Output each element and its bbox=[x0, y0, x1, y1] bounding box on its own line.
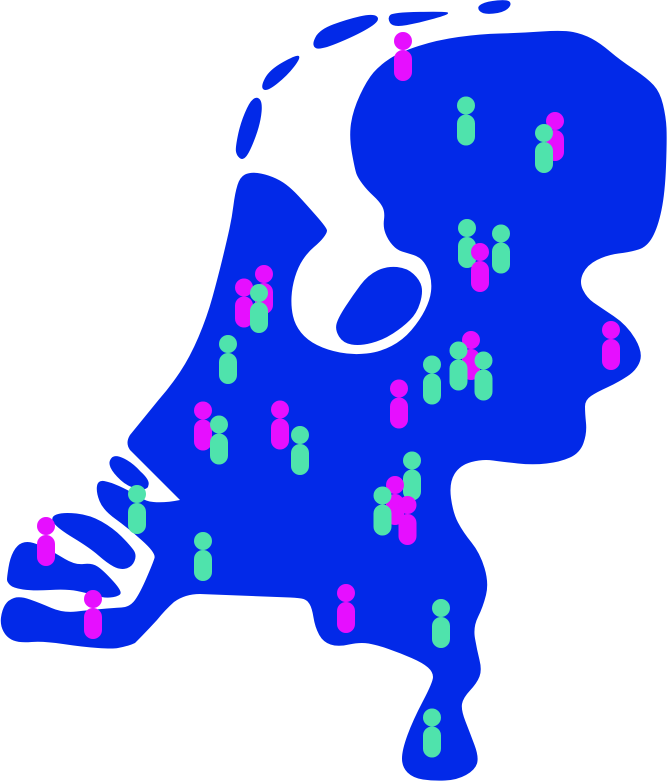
marker: magenta person, south-west island bbox=[37, 517, 55, 566]
marker: green person, west-centre bbox=[210, 416, 228, 464]
marker: green person, centre-north right bbox=[492, 224, 510, 274]
marker: green person, south-west peninsula bbox=[128, 485, 146, 534]
map: inner lake polder island bbox=[336, 267, 422, 345]
marker: magenta person, river area bbox=[386, 476, 404, 525]
marker: magenta person, centre bbox=[390, 380, 408, 428]
marker: magenta person, east edge bbox=[602, 321, 620, 370]
marker: green person, mid-west bbox=[291, 426, 309, 475]
marker: magenta person, far south-west bbox=[84, 590, 102, 639]
marker: green person, south-east bbox=[432, 599, 450, 648]
map: northern island 1 bbox=[236, 98, 261, 158]
marker: magenta person, centre-east bbox=[462, 331, 480, 380]
map: south-west island, large bbox=[7, 542, 121, 598]
marker: magenta person, north coast bbox=[394, 32, 412, 81]
marker: magenta person, north-east bbox=[546, 112, 564, 161]
marker: green person, river area top bbox=[403, 452, 421, 500]
marker: green person, centre-north left bbox=[458, 219, 476, 268]
marker: green person, north-east bbox=[535, 124, 553, 173]
map: northern island 5 bbox=[479, 1, 510, 13]
marker: green person, Holland upper bbox=[250, 284, 268, 333]
marker: green person, west bbox=[219, 335, 237, 384]
marker: magenta person, south bbox=[337, 584, 355, 633]
map: northern island 4 bbox=[389, 12, 448, 25]
marker: green person, river area left bbox=[374, 486, 392, 536]
marker: green person, centre-east right bbox=[474, 352, 492, 400]
marker: magenta person, centre-north bbox=[471, 243, 489, 292]
marker: magenta person, Holland upper left bbox=[235, 278, 253, 328]
map: northern island 3 bbox=[314, 16, 377, 48]
marker: magenta person, mid-west bbox=[271, 400, 289, 450]
marker: green person, centre-east middle bbox=[450, 342, 468, 390]
marker: green person, centre-east left bbox=[423, 356, 441, 404]
marker: magenta person, river area right bbox=[398, 496, 416, 545]
map: northern island 2 bbox=[263, 56, 299, 89]
marker: green person, south-west bbox=[194, 532, 212, 581]
map: south-west island, middle bbox=[52, 513, 136, 569]
marker: magenta person, Holland upper right bbox=[255, 265, 273, 314]
marker: magenta person, west-centre bbox=[194, 402, 212, 450]
marker: green person, far south bbox=[423, 708, 441, 758]
map: south-west island, narrow bbox=[109, 456, 149, 489]
marker: green person, north bbox=[457, 96, 475, 146]
